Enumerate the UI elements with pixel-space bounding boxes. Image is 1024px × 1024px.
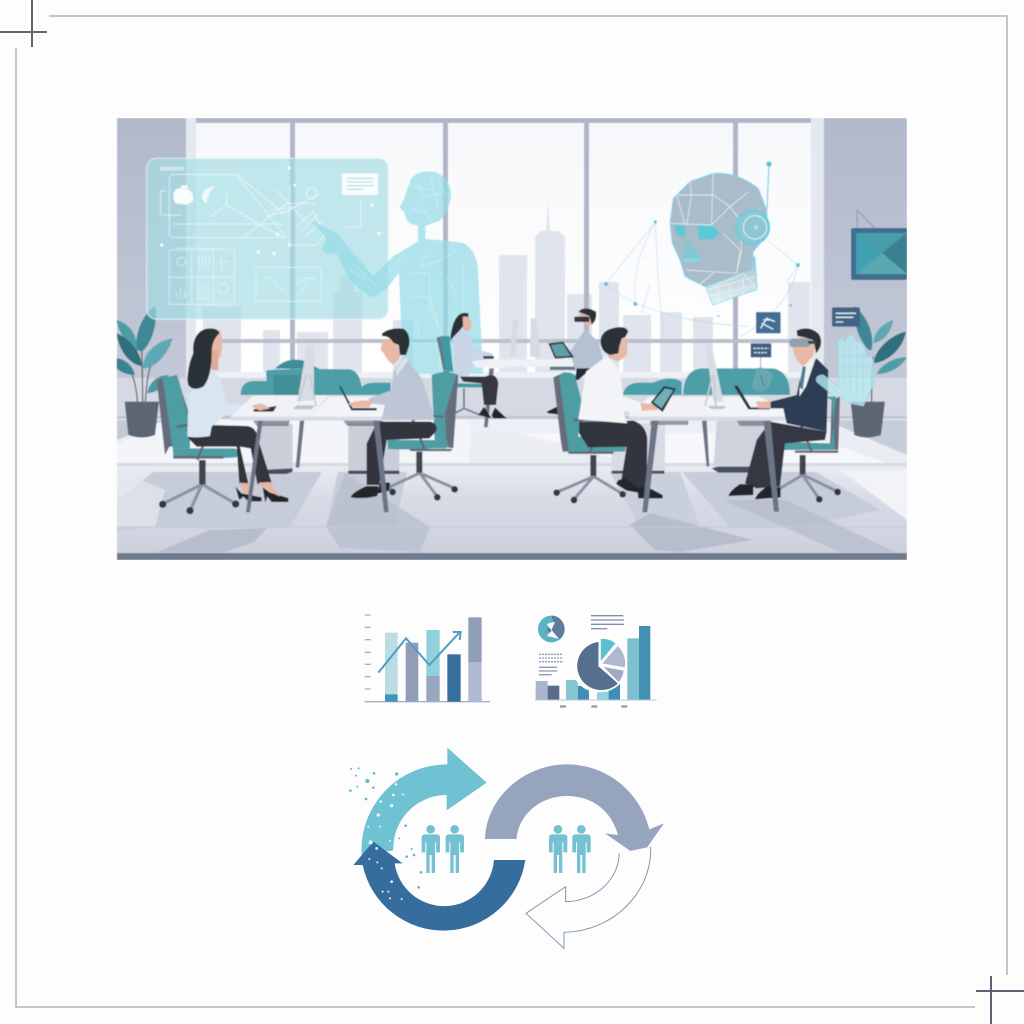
chair <box>553 372 627 503</box>
window frame <box>196 118 811 375</box>
desk cabinets <box>260 420 399 474</box>
arrow: teal <box>361 748 487 856</box>
crop mark: top left <box>0 0 47 47</box>
laptop <box>339 386 377 410</box>
chair <box>157 375 239 514</box>
hologram humanoid figure <box>313 172 483 373</box>
mixed chart with pie <box>535 616 657 708</box>
chair <box>387 371 458 501</box>
person: man in white shirt with tablet <box>553 327 676 503</box>
people group: right <box>549 825 591 873</box>
dashboard donut glyphs <box>160 166 381 255</box>
arrow: dark blue <box>353 842 525 931</box>
monitor <box>705 344 727 409</box>
AI mesh head hologram <box>604 161 800 340</box>
people group: left <box>422 825 464 873</box>
monitor <box>293 344 316 409</box>
woman blouse <box>187 365 254 437</box>
person: background woman at desk <box>437 313 507 418</box>
tablet <box>651 386 676 412</box>
head antenna <box>766 161 772 209</box>
arrow: outline <box>526 847 651 948</box>
plant: right <box>851 306 907 437</box>
donut icon <box>538 616 565 642</box>
floor <box>117 419 907 553</box>
panel: office illustration <box>117 118 907 560</box>
holographic dashboard panel <box>147 158 388 319</box>
desk: left pair <box>231 344 402 512</box>
person: man in suit with VR headset <box>728 328 841 503</box>
background furniture: sofas and desks <box>241 318 790 427</box>
person: woman foreground left with chair <box>157 328 399 514</box>
text placeholder block <box>539 654 563 675</box>
right desk leg near white shirt man <box>642 421 658 512</box>
dashboard note card <box>342 173 378 195</box>
legend lines <box>591 616 624 629</box>
woman shoes <box>235 487 288 503</box>
office back wall and windows <box>117 118 907 560</box>
trend arrow <box>378 632 461 673</box>
man pants <box>579 421 647 488</box>
desk: right pair <box>612 344 795 474</box>
back desk <box>472 359 510 427</box>
head eyes and nose <box>674 225 720 262</box>
right desk leg near suit man <box>763 421 779 512</box>
man shirt <box>369 356 435 420</box>
city skyline <box>203 200 810 375</box>
head earpiece <box>736 211 769 244</box>
particle dots <box>349 767 422 889</box>
man pants <box>367 422 436 485</box>
person: man foreground left <box>339 328 458 501</box>
arrow: slate <box>485 764 664 858</box>
man pants <box>745 422 827 488</box>
bar chart with trend arrow <box>365 615 490 702</box>
floor bottom band <box>117 553 907 560</box>
pie chart <box>572 638 626 692</box>
left desk front leg <box>373 421 389 512</box>
chart axis <box>365 615 490 702</box>
laptop <box>734 385 770 409</box>
holographic hand <box>752 335 874 406</box>
cycle diagram <box>349 748 664 948</box>
bars <box>535 626 657 700</box>
person: background man with VR headset <box>547 308 605 415</box>
crop mark: bottom right <box>976 976 1024 1024</box>
floor shadows <box>157 473 895 552</box>
man shoes <box>616 478 663 498</box>
chair <box>777 397 841 503</box>
man shoes <box>351 483 390 498</box>
axis tick marks <box>560 705 627 708</box>
chart bars <box>385 617 482 702</box>
man shirt <box>578 356 647 423</box>
plant: left <box>117 306 173 437</box>
woman pants <box>188 425 272 484</box>
man suit <box>768 358 828 432</box>
wall screen <box>851 210 907 280</box>
network arcs <box>606 222 798 340</box>
dashboard icon tiles <box>169 250 321 304</box>
woman hand and keyboard <box>252 404 277 412</box>
man shoes <box>728 484 781 499</box>
dashboard circuit lines <box>161 174 361 248</box>
floating data cards <box>751 307 860 375</box>
